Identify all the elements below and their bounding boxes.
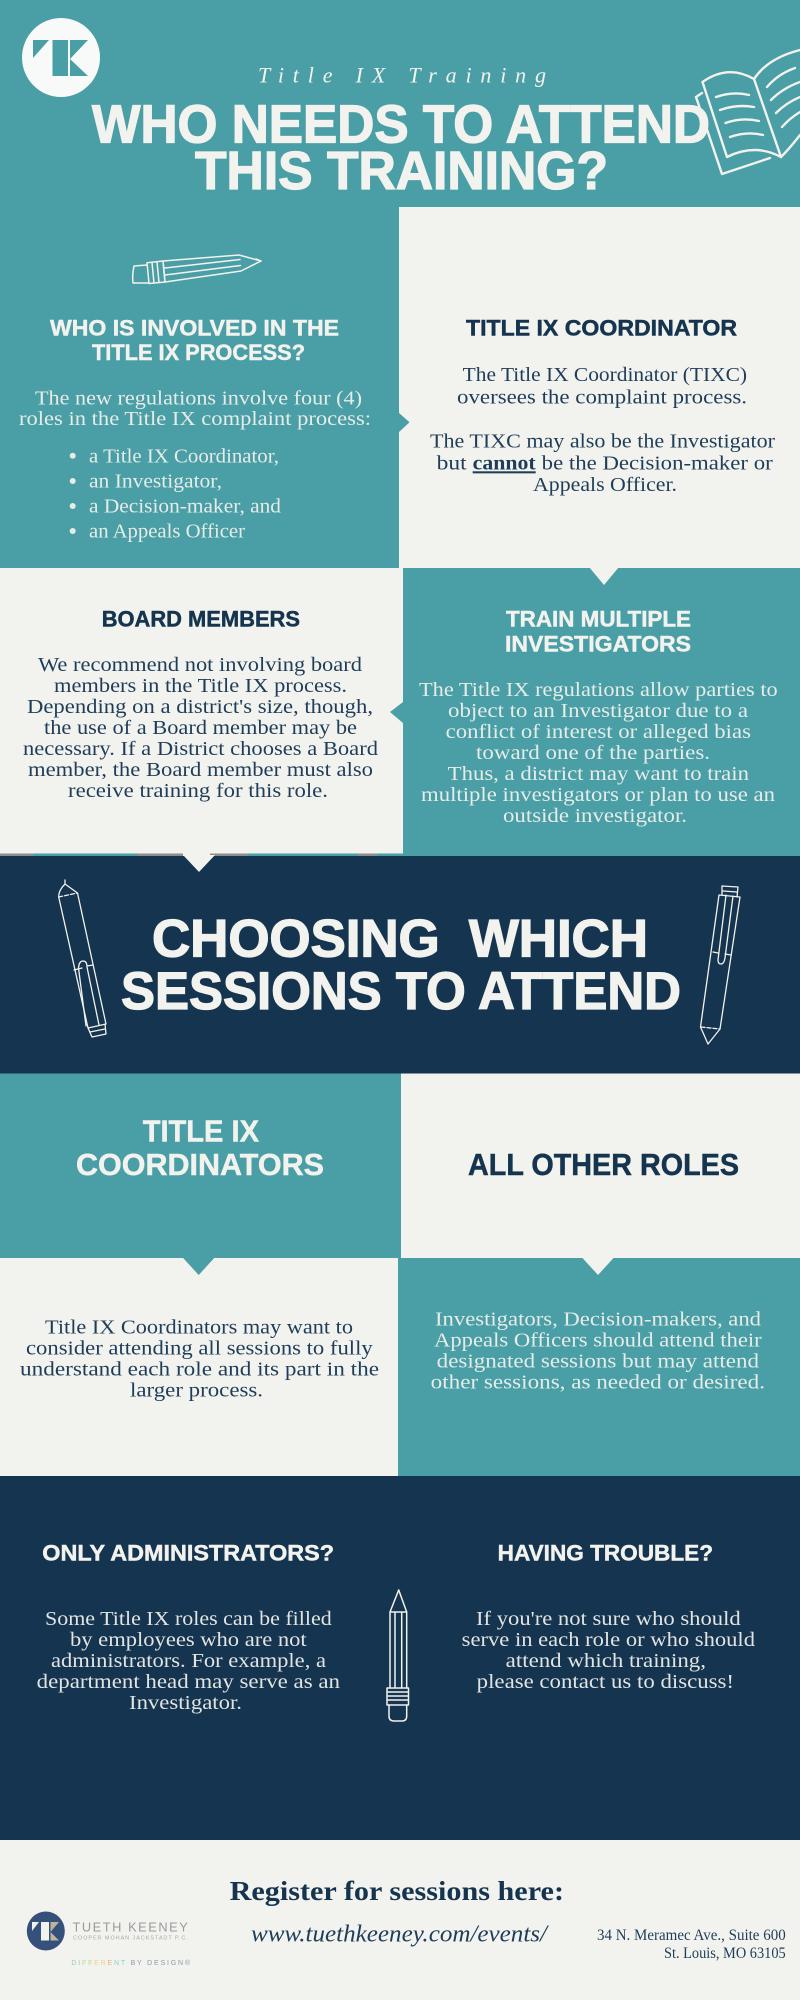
logo: tueth keeney: COOPER MOHAN JACKSTADT P.C. xyxy=(73,1935,188,1941)
text: having trouble: serve in each role or who should xyxy=(462,1629,755,1651)
title: WHO NEEDS TO ATTEND xyxy=(92,95,710,154)
body text xyxy=(20,1316,379,1401)
icon: left pen xyxy=(59,880,106,1037)
body text: multiple investigators or plan to use an xyxy=(421,784,775,806)
body text: The TIXC may also be the Investigator xyxy=(430,430,775,452)
logo: tueth keeney: TUETH KEENEY xyxy=(72,1920,188,1935)
banner: choosing which sessions xyxy=(0,855,800,1074)
body text: understand each role and its part in the xyxy=(20,1358,379,1380)
text: only administrators: administrators. For example, a xyxy=(51,1650,326,1672)
body text xyxy=(419,679,778,827)
panel: title ix coordinator xyxy=(399,207,800,568)
intro text: The new regulations involve four (4) xyxy=(35,387,362,409)
body text: Thus, a district may want to train xyxy=(448,763,749,785)
body text: consider attending all sessions to fully xyxy=(26,1337,374,1359)
text: only administrators: Some Title IX roles can be filled xyxy=(45,1608,332,1630)
title xyxy=(92,95,710,201)
text: having trouble: If you're not sure who should xyxy=(476,1608,741,1630)
heading: only administrators: ONLY ADMINISTRATORS? xyxy=(42,1541,334,1566)
body text: object to an Investigator due to a xyxy=(448,700,748,722)
body text xyxy=(430,364,775,496)
panel: navy notes xyxy=(0,1476,800,1840)
body text: Appeals Officers should attend their xyxy=(434,1329,762,1351)
body text: necessary. If a District chooses a Board xyxy=(23,738,378,760)
arrow: down pointer xyxy=(582,1258,614,1275)
logo: tueth keeney xyxy=(27,1912,191,1967)
bullet list xyxy=(70,445,281,542)
body text xyxy=(23,654,378,802)
body text: member, the Board member must also xyxy=(28,759,373,781)
body text: Depending on a district's size, though, xyxy=(27,696,373,718)
heading xyxy=(50,316,339,365)
heading: TITLE IX xyxy=(143,1114,259,1149)
bullet list: a Decision-maker, and xyxy=(89,495,281,517)
body text: toward one of the parties. xyxy=(476,742,710,764)
intro text: roles in the Title IX complaint process: xyxy=(19,408,371,430)
text: having trouble: attend which training, xyxy=(506,1650,706,1672)
heading: SESSIONS TO ATTEND xyxy=(121,962,681,1021)
header panel xyxy=(0,0,800,207)
icon: open book xyxy=(696,50,800,174)
arrow: left pointer xyxy=(390,702,403,723)
address: 34 N. Meramec Ave., Suite 600 xyxy=(597,1927,786,1944)
heading: COORDINATORS xyxy=(76,1147,324,1182)
text: only administrators: department head may serve as an xyxy=(37,1671,340,1693)
panel: all other roles text xyxy=(398,1258,800,1476)
bullet list: a Title IX Coordinator, xyxy=(89,445,279,467)
address: St. Louis, MO 63105 xyxy=(664,1945,786,1962)
icon: pencil xyxy=(387,1590,408,1721)
address xyxy=(597,1927,786,1962)
body text: conflict of interest or alleged bias xyxy=(446,721,751,743)
body text: cannot xyxy=(473,452,536,474)
body text: The Title IX regulations allow parties to xyxy=(419,679,778,701)
call to action: Register for sessions here: xyxy=(230,1876,564,1906)
text: having trouble: please contact us to discuss! xyxy=(477,1671,734,1693)
panel: title ix coordinators heading xyxy=(0,1074,401,1258)
icon: right pen xyxy=(700,886,740,1044)
subtitle: Title IX Training xyxy=(258,62,546,87)
arrow: down pointer xyxy=(183,1258,215,1275)
body text: other sessions, as needed or desired. xyxy=(431,1371,765,1393)
body text: outside investigator. xyxy=(503,805,687,827)
arrow: down pointer xyxy=(183,855,215,872)
bullet list: an Appeals Officer xyxy=(89,520,245,542)
heading: having trouble: HAVING TROUBLE? xyxy=(498,1541,713,1566)
panel: who is involved xyxy=(0,207,399,568)
body text: but xyxy=(437,452,467,474)
body text: Title IX Coordinators may want to xyxy=(45,1316,353,1338)
heading: TITLE IX PROCESS? xyxy=(92,340,305,365)
title: THIS TRAINING? xyxy=(195,142,608,201)
panel: title ix coordinators text xyxy=(0,1258,398,1476)
heading: WHO IS INVOLVED IN THE xyxy=(50,316,339,341)
panel: all other roles heading xyxy=(401,1074,800,1258)
heading: ALL OTHER ROLES xyxy=(468,1147,739,1182)
heading: CHOOSING WHICH xyxy=(152,910,648,969)
logo badge xyxy=(22,18,100,97)
icon: pencil xyxy=(133,255,261,284)
text: having trouble xyxy=(462,1608,755,1693)
heading: BOARD MEMBERS xyxy=(102,607,300,632)
panel: board members xyxy=(0,568,403,856)
text: only administrators: by employees who are not xyxy=(70,1629,307,1651)
body text xyxy=(431,1308,765,1393)
body text: receive training for this role. xyxy=(68,780,328,802)
body text: designated sessions but may attend xyxy=(437,1350,759,1372)
panel: train multiple investigators xyxy=(390,567,800,856)
heading xyxy=(121,910,681,1021)
body text: oversees the complaint process. xyxy=(457,386,747,408)
body text: larger process. xyxy=(130,1379,263,1401)
footer xyxy=(0,1840,800,2000)
registration link: www.tuethkeeney.com/events/ xyxy=(251,1922,549,1948)
text: only administrators: Investigator. xyxy=(129,1692,242,1714)
logo: tueth keeney: DI FF ER E NT BY DESIGN® xyxy=(71,1959,191,1967)
body text: members in the Title IX process. xyxy=(54,675,347,697)
heading: TRAIN MULTIPLE xyxy=(506,607,691,632)
heading xyxy=(76,1114,324,1182)
heading xyxy=(505,607,691,656)
arrow: right pointer xyxy=(399,413,410,432)
body text: Appeals Officer. xyxy=(533,474,677,496)
body text: We recommend not involving board xyxy=(38,654,362,676)
arrow: down pointer xyxy=(589,567,619,585)
body text: Investigators, Decision-makers, and xyxy=(435,1308,761,1330)
body text: the use of a Board member may be xyxy=(44,717,357,739)
body text: The Title IX Coordinator (TIXC) xyxy=(463,364,747,386)
heading: TITLE IX COORDINATOR xyxy=(466,316,737,341)
body text: be the Decision-maker or xyxy=(542,452,773,474)
bullet list: an Investigator, xyxy=(89,470,222,492)
intro text xyxy=(19,387,371,430)
heading: INVESTIGATORS xyxy=(505,631,691,656)
text: only administrators xyxy=(37,1608,340,1714)
